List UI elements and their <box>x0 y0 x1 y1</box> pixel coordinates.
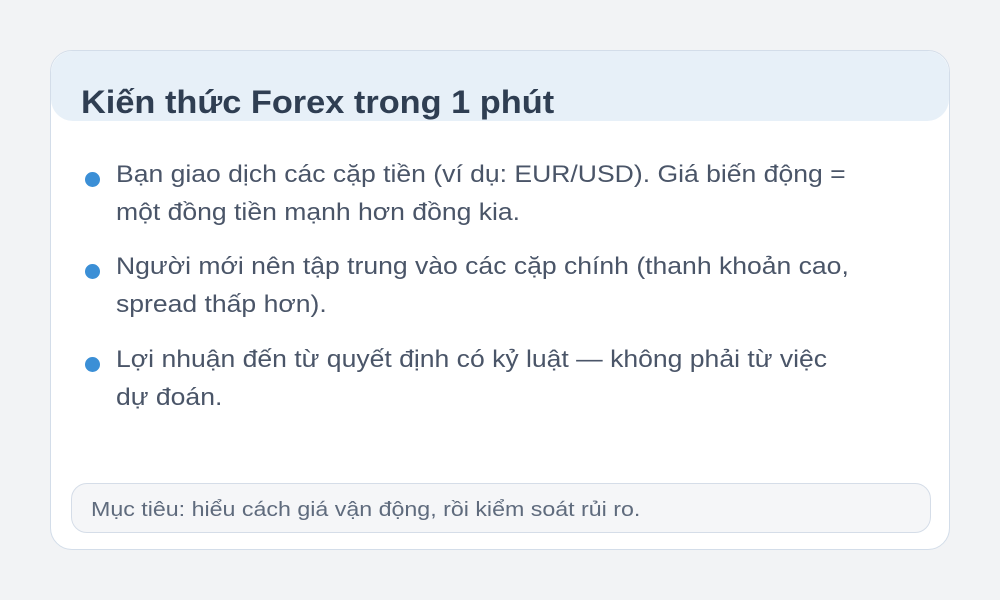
bullet 1: một đồng tiền mạnh hơn đồng kia. <box>116 199 520 226</box>
bullet 2: Người mới nên tập trung vào các cặp chính (thanh khoản cao, <box>116 253 849 280</box>
bullet 3 <box>85 346 827 411</box>
bullet 1: Bạn giao dịch các cặp tiền (ví dụ: EUR/USD). Giá biến động = <box>116 161 846 188</box>
title: Kiến thức Forex trong 1 phút <box>81 84 554 120</box>
card <box>50 50 950 550</box>
bullet 1 <box>85 161 846 226</box>
header band <box>51 51 949 121</box>
footer note: Mục tiêu: hiểu cách giá vận động, rồi kiểm soát rủi ro. <box>91 499 640 521</box>
bullet 3: dự đoán. <box>116 384 222 411</box>
footer note <box>71 483 931 533</box>
bullet 2: spread thấp hơn). <box>116 291 327 318</box>
bullet 2 <box>85 253 849 318</box>
bullet 3: Lợi nhuận đến từ quyết định có kỷ luật — không phải từ việc <box>116 346 827 373</box>
